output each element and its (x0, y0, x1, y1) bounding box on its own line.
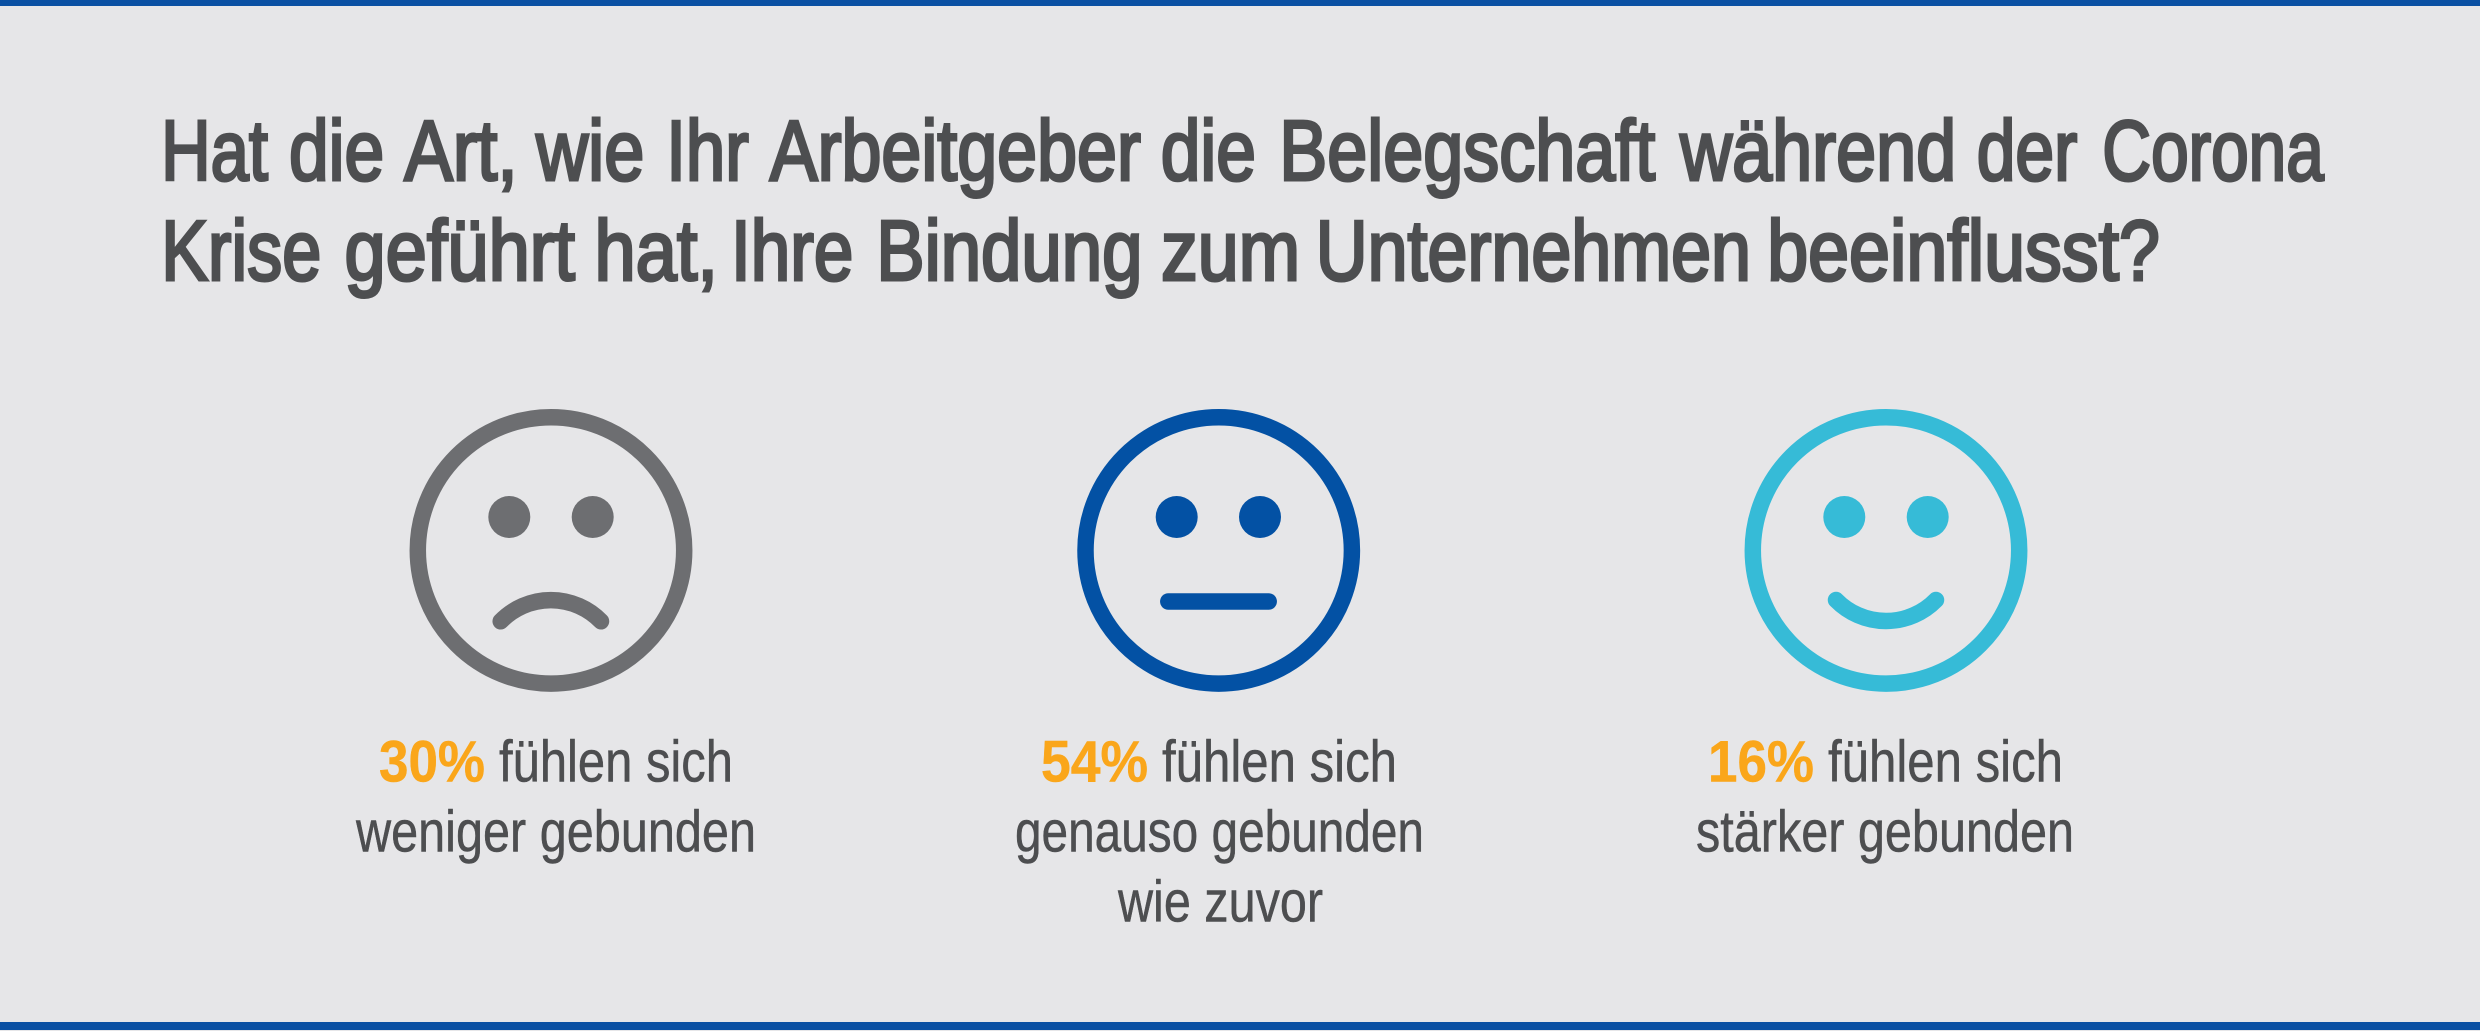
label: 30 percent less bound: weniger gebunden (355, 800, 756, 864)
label: 16 percent more bound: stärker gebunden (1696, 800, 2074, 864)
title: während (1679, 104, 1956, 199)
label: 54 percent equally bound: genauso gebunden (1015, 800, 1424, 864)
title: Unternehmen (1316, 204, 1751, 299)
title (161, 104, 2324, 299)
title: Corona (2102, 104, 2324, 199)
label: 30 percent less bound (355, 730, 756, 864)
label: 16 percent more bound: 16% (1708, 730, 1814, 794)
bottom blue bar (0, 1022, 2480, 1030)
title: der (1977, 104, 2077, 199)
title: Belegschaft (1279, 104, 1655, 199)
label: 54 percent equally bound: 54% (1041, 730, 1148, 794)
title: Arbeitgeber (770, 104, 1141, 199)
label: 54 percent equally bound: fühlen sich (1162, 730, 1397, 794)
label: 16 percent more bound: fühlen sich (1828, 730, 2063, 794)
label: 16 percent more bound (1696, 730, 2074, 864)
icon: neutral face (1086, 417, 1352, 684)
title: Ihre (731, 204, 853, 299)
title: wie (535, 104, 644, 199)
title: die (289, 104, 384, 199)
title: hat, (594, 204, 718, 299)
label: 54 percent equally bound (1015, 730, 1424, 934)
title: Hat (161, 104, 268, 199)
label: 54 percent equally bound: wie zuvor (1117, 870, 1323, 934)
title: zum (1161, 204, 1300, 299)
title: Krise (161, 204, 321, 299)
title: geführt (344, 204, 575, 299)
icon: happy face (1753, 417, 2019, 684)
title: beeinflusst? (1767, 204, 2160, 299)
title: Art, (404, 104, 518, 199)
label: 30 percent less bound: fühlen sich (499, 730, 733, 794)
title: die (1161, 104, 1256, 199)
top blue bar (0, 0, 2480, 6)
icon: sad face (418, 417, 684, 684)
title: Bindung (876, 204, 1142, 299)
label: 30 percent less bound: 30% (379, 730, 485, 794)
title: Ihr (666, 104, 749, 199)
